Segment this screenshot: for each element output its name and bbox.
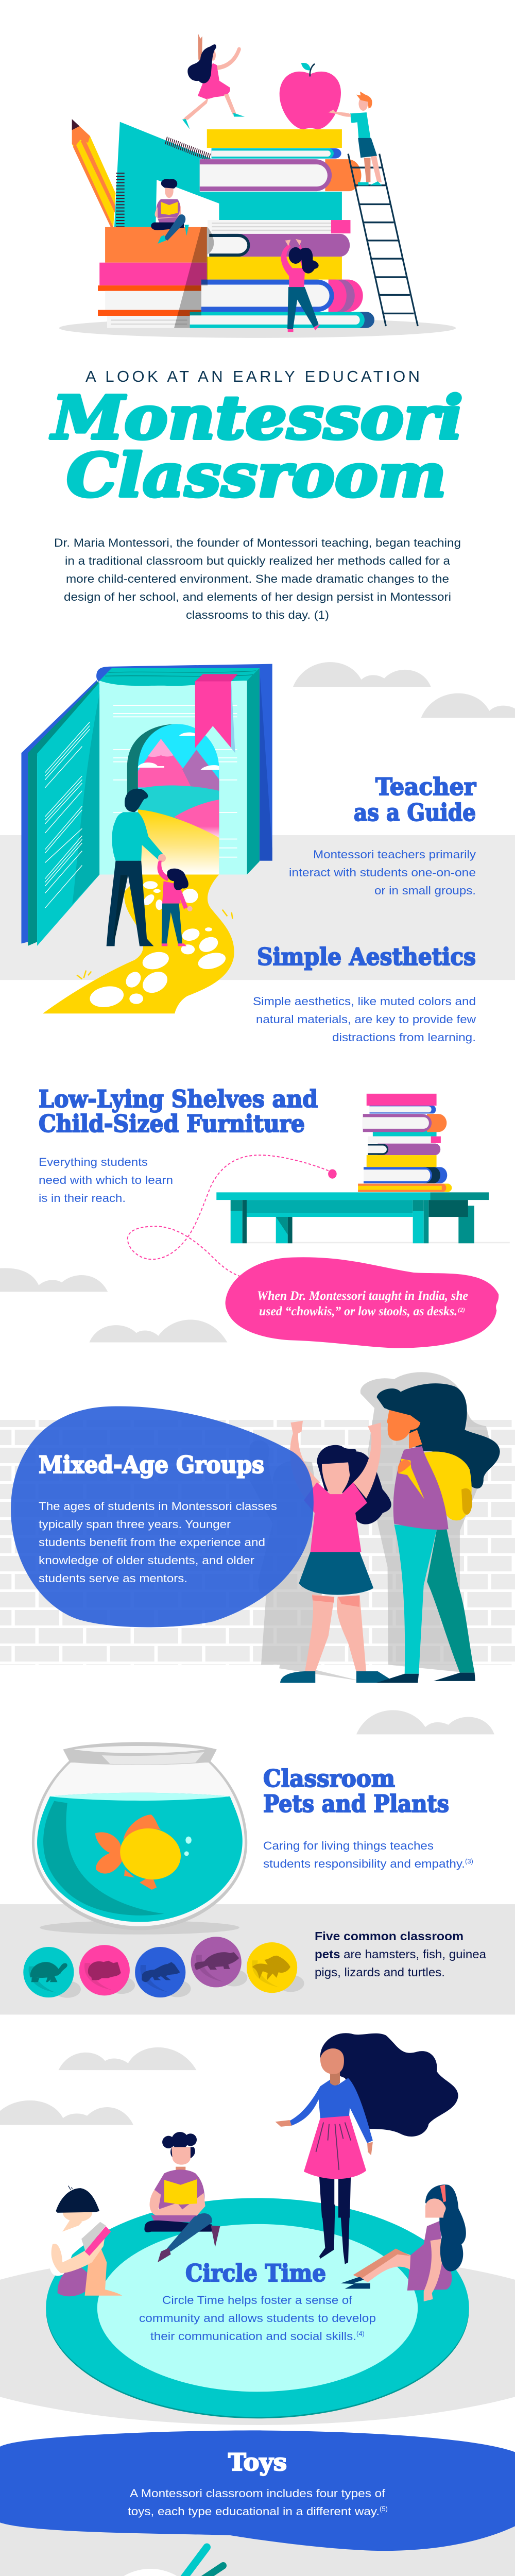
book spine shadow	[174, 227, 214, 328]
character: teacher	[275, 2033, 458, 2217]
winding path with stones	[43, 874, 234, 1013]
heading: pets and plants	[263, 1765, 449, 1818]
text: circle time: community and allows students to develop	[139, 2312, 376, 2325]
book stack on table	[358, 1094, 452, 1192]
character: teacher	[107, 789, 166, 946]
text: shelves description: need with which to learn	[39, 1174, 173, 1187]
boy lower body	[144, 2213, 220, 2262]
icon: apple	[280, 63, 341, 129]
teacher legs	[319, 2205, 350, 2264]
icon: rat	[191, 1937, 242, 1987]
heading: pets and plants: Classroom	[263, 1765, 395, 1792]
text: mixed-age groups: students serve as mentors.	[39, 1572, 187, 1585]
left girl lower body	[48, 2203, 122, 2296]
title: Montessori	[50, 383, 463, 453]
text: shelves description	[39, 1156, 173, 1205]
illustration: stack of books with children	[59, 33, 456, 338]
icon: goldfish silhouette	[247, 1942, 297, 1993]
text: teacher as a guide: or in small groups.	[374, 884, 476, 897]
text: mixed-age groups: knowledge of older students, and older	[39, 1554, 254, 1567]
text: circle time	[139, 2294, 376, 2343]
book covers	[21, 664, 272, 946]
character: right girl head	[425, 2184, 459, 2217]
panel: teacher as a guide and simple aesthetics	[0, 662, 515, 1044]
intro paragraph	[54, 536, 461, 621]
blue text blob	[11, 1406, 314, 1627]
intro paragraph: more child-centered environment. She made dramatic changes to the	[66, 572, 449, 585]
icon: chameleon	[135, 1947, 185, 1997]
right book stack	[190, 129, 374, 328]
text: shelves description: is in their reach.	[39, 1192, 126, 1205]
bookmark	[195, 674, 238, 753]
text: pets and plants: (3)	[465, 1857, 473, 1865]
intro paragraph: in a traditional classroom but quickly realized her methods called for a	[65, 554, 451, 567]
heading: low-lying shelves: Child-Sized Furniture	[39, 1110, 305, 1138]
icons: yarn and xylophone	[87, 2547, 223, 2576]
heading: toys: Toys	[228, 2448, 287, 2476]
heading: low-lying shelves	[39, 1085, 318, 1138]
text: circle time: Circle Time helps foster a sense of	[162, 2294, 353, 2307]
text: toys intro: A Montessori classroom includes four types of	[130, 2487, 386, 2500]
illustration: rug with teacher and children	[0, 2033, 515, 2425]
panel: circle time	[0, 2033, 515, 2425]
character: boy on ladder	[329, 92, 382, 185]
panel: toys	[0, 2430, 515, 2576]
text: mixed-age groups: students benefit from the experience and	[39, 1536, 265, 1549]
text: simple aesthetics: natural materials, are key to provide few	[256, 1013, 476, 1026]
text: toys intro	[128, 2487, 388, 2518]
character: jumping girl	[182, 33, 245, 129]
text: mixed-age groups: The ages of students in Montessori classes	[39, 1500, 277, 1513]
heading: simple aesthetics: Simple Aesthetics	[257, 943, 476, 971]
illustration: fishbowl and pet icons	[0, 1710, 515, 2014]
illustration: open storybook with teacher and child	[0, 662, 515, 1013]
heading: teacher as a guide	[354, 773, 476, 826]
rug and lower figures	[0, 2198, 515, 2425]
character: left girl head	[56, 2186, 99, 2213]
right page	[99, 668, 260, 874]
upper figures and clouds	[0, 2033, 459, 2217]
text: pets and plants: students responsibility and empathy.	[263, 1857, 465, 1870]
icon: hamster	[79, 1945, 130, 1995]
illustration: two students	[11, 1372, 500, 1683]
character: girl in pink reaching up	[281, 239, 320, 332]
banner	[0, 2430, 515, 2551]
icon: yarn with needles	[110, 2547, 223, 2576]
intro paragraph: design of her school, and elements of her design persist in Montessori	[64, 590, 451, 603]
title	[50, 383, 463, 511]
subtitle: A LOOK AT AN EARLY EDUCATION	[85, 367, 420, 385]
text: simple aesthetics: Simple aesthetics, like muted colors and	[253, 995, 476, 1008]
pet icons	[23, 1937, 304, 1998]
illustration: books on low table with callout path	[0, 1094, 510, 1348]
heading: mixed-age groups: Mixed-Age Groups	[39, 1451, 264, 1479]
heading: low-lying shelves: Low-Lying Shelves and	[39, 1085, 318, 1113]
text: five common classroom pets	[315, 1929, 486, 1979]
white toy circles	[98, 2569, 203, 2576]
text: simple aesthetics	[253, 995, 476, 1044]
character: girl in pink	[280, 1421, 391, 1683]
dashed arrow path	[128, 1155, 329, 1276]
callout blob	[226, 1257, 499, 1348]
panel: mixed-age groups	[0, 1372, 515, 1683]
text: simple aesthetics: distractions from learning.	[332, 1031, 476, 1044]
character: boy reading	[150, 2132, 205, 2216]
callout text: used “chowkis,” or low stools, as desks.	[259, 1304, 457, 1318]
title: Classroom	[66, 441, 447, 511]
intro paragraph: classrooms to this day. (1)	[186, 608, 329, 621]
character: older student with backpack	[376, 1383, 500, 1683]
text: teacher as a guide	[289, 848, 476, 897]
panel: hero	[50, 33, 463, 621]
text: five common classroom pets: pigs, lizards and turtles.	[315, 1965, 445, 1979]
brick wall	[0, 1420, 515, 1665]
icon: fishbowl	[32, 1742, 247, 1930]
icon: ladder	[348, 154, 418, 326]
text: pets and plants	[263, 1839, 473, 1870]
text: mixed-age groups: typically span three years. Younger	[39, 1518, 231, 1531]
text: pets and plants: Caring for living things teaches	[263, 1839, 434, 1852]
panel: low-lying shelves	[0, 1085, 510, 1348]
text: five common classroom pets: Five common classroom	[315, 1929, 464, 1943]
callout text: When Dr. Montessori taught in India, she	[257, 1289, 468, 1303]
text: toys intro: (5)	[380, 2505, 388, 2513]
story arch with landscape	[127, 724, 219, 874]
icon: goldfish	[95, 1815, 192, 1890]
figure shadows	[250, 1372, 493, 1681]
heading: pets and plants: Pets and Plants	[263, 1790, 449, 1818]
low table	[216, 1192, 510, 1243]
text: circle time: (4)	[356, 2330, 365, 2337]
callout text	[257, 1289, 468, 1318]
text: teacher as a guide: Montessori teachers primarily	[313, 848, 476, 861]
icon: turtle	[23, 1947, 74, 1997]
icon: pencil	[72, 119, 115, 227]
right girl lower body	[340, 2208, 466, 2301]
text: circle time: their communication and social skills.	[150, 2330, 356, 2343]
heading: circle time: Circle Time	[185, 2259, 326, 2287]
left book stack	[98, 227, 207, 328]
text: mixed-age groups	[39, 1500, 277, 1585]
grey toys background	[0, 2514, 515, 2576]
heading: teacher as a guide: as a Guide	[354, 799, 476, 826]
callout text: (2)	[458, 1306, 465, 1313]
panel: classroom pets and plants	[0, 1710, 515, 2014]
heading: teacher as a guide: Teacher	[375, 773, 476, 801]
character: sitting child reading	[151, 179, 189, 244]
text: toys intro: toys, each type educational in a different way.	[128, 2505, 380, 2518]
intro paragraph: Dr. Maria Montessori, the founder of Montessori teaching, began teaching	[54, 536, 461, 549]
text: teacher as a guide: interact with students one-on-one	[289, 866, 476, 879]
icon: set square ruler	[114, 122, 342, 227]
text: shelves description: Everything students	[39, 1156, 148, 1168]
character: child	[158, 861, 193, 946]
text: five common classroom pets: pets are hamsters, fish, guinea	[315, 1947, 486, 1961]
